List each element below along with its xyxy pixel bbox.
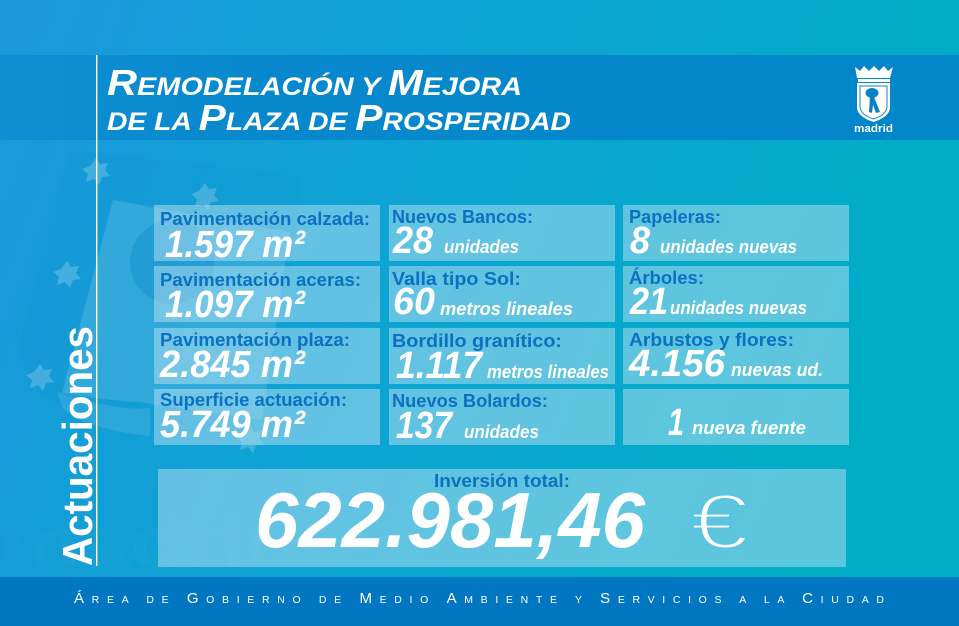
- panel: Nuevos Bancos: unidades: [444, 237, 519, 257]
- panel: Nuevos Bancos: Nuevos Bancos:: [392, 206, 533, 227]
- title: [107, 62, 571, 138]
- panel: Superficie actuación: [154, 389, 380, 446]
- panel: Nuevos Bancos: [389, 205, 615, 262]
- panel: nueva fuente: nueva fuente: [692, 418, 806, 438]
- panel: nueva fuente: [623, 389, 849, 445]
- panel: Bordillo granítico: [389, 328, 615, 387]
- panel: Nuevos Bolardos: 137: [396, 405, 454, 447]
- panel: Árboles: unidades nuevas: [670, 298, 807, 318]
- panel: total investment: [158, 469, 846, 567]
- panel: Pavimentación aceras: 1.097 m²: [165, 284, 306, 326]
- panel: Pavimentación aceras: Pavimentación aceras:: [160, 269, 361, 290]
- icon: euro sign: €: [690, 477, 749, 565]
- panel: Bordillo granítico: Bordillo granítico:: [392, 330, 562, 351]
- watermark: city crest: [0, 150, 300, 581]
- panel: nueva fuente: 1: [668, 402, 684, 444]
- panel: Bordillo granítico: metros lineales: [487, 362, 609, 382]
- title line 2: DE LA PLAZA DE PROSPERIDAD: [107, 97, 571, 138]
- panel: Pavimentación plaza: 2.845 m²: [159, 344, 306, 386]
- panel: Papeleras: Papeleras:: [629, 206, 721, 227]
- header band: [0, 55, 959, 140]
- logo: Madrid crest: madrid: [854, 123, 893, 135]
- panel: Pavimentación calzada: Pavimentación calzada:: [160, 208, 370, 229]
- panel: Arbustos y flores: Arbustos y flores:: [629, 329, 794, 350]
- panel: Arbustos y flores: [623, 328, 849, 385]
- footer text: Á REA DE G OBIERNO DE M EDIO A MBIENTE Y S ERVICIOS A LA C IUDAD: [74, 590, 884, 607]
- watermark: city crest: madrid: [0, 503, 300, 581]
- logo: Madrid crest: [854, 66, 893, 135]
- panel: total investment: 622.981,46: [255, 476, 646, 564]
- panel: Superficie actuación: 5.749 m²: [160, 404, 306, 446]
- title line 1: REMODELACIÓN Y MEJORA: [107, 62, 522, 103]
- panel: Pavimentación calzada: 1.597 m²: [165, 224, 306, 266]
- panel: Árboles: [623, 266, 849, 323]
- panel: Pavimentación plaza: Pavimentación plaza:: [160, 329, 350, 350]
- panel: Arbustos y flores: nuevas ud.: [731, 360, 823, 380]
- panel: Nuevos Bolardos: [389, 389, 615, 447]
- panel: Valla tipo Sol: 60: [393, 281, 435, 323]
- vertical rule: [96, 55, 97, 566]
- panel: Valla tipo Sol: metros lineales: [440, 299, 573, 319]
- panel: Pavimentación plaza: [154, 328, 380, 386]
- panel: Pavimentación calzada: [154, 205, 380, 266]
- panel: Nuevos Bancos: 28: [392, 220, 434, 262]
- panel: Árboles: 21: [629, 281, 668, 323]
- panel: Valla tipo Sol: [389, 266, 615, 323]
- panel: Pavimentación aceras: [154, 266, 380, 326]
- panel: Árboles: Árboles:: [629, 267, 704, 288]
- panel: Arbustos y flores: 4.156: [628, 343, 726, 385]
- panel: Papeleras: unidades nuevas: [660, 237, 797, 257]
- panel: Papeleras: [623, 205, 849, 262]
- panel: total investment: Inversión total:: [434, 471, 570, 491]
- panel: Nuevos Bolardos: Nuevos Bolardos:: [392, 390, 548, 411]
- panel: Papeleras: 8: [630, 220, 651, 262]
- panel: Valla tipo Sol: Valla tipo Sol:: [392, 268, 521, 289]
- panel: Nuevos Bolardos: unidades: [464, 422, 539, 442]
- section label: Actuaciones: Actuaciones: [54, 326, 101, 566]
- panel: Superficie actuación: Superficie actuación:: [160, 389, 347, 410]
- footer band: [0, 577, 959, 626]
- panel: Bordillo granítico: 1.117: [396, 345, 484, 387]
